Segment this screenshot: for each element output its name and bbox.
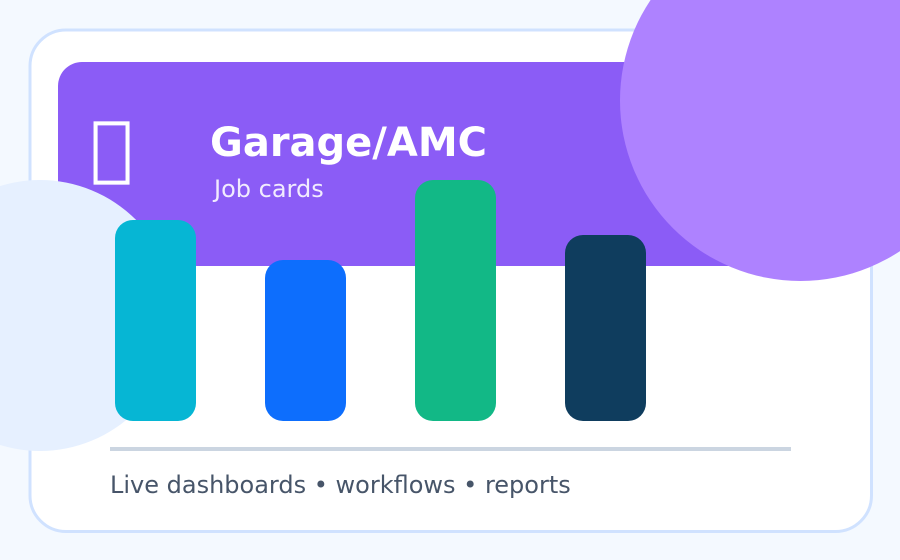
panel: header [58, 62, 842, 266]
footer caption: Live dashboards • workflows • reports [110, 471, 571, 499]
bar 1 [115, 220, 196, 421]
bar 4 [565, 235, 646, 421]
icon: missing glyph box:  [90, 105, 133, 189]
subtitle: Job cards [212, 175, 324, 203]
bar 2 [265, 260, 346, 421]
bar chart [115, 180, 646, 421]
title: Garage/AMC [210, 120, 487, 166]
bar 3 [415, 180, 496, 421]
decorative circle: top right [620, 0, 900, 281]
decorative circle: left [0, 180, 176, 451]
axis line [110, 447, 791, 451]
